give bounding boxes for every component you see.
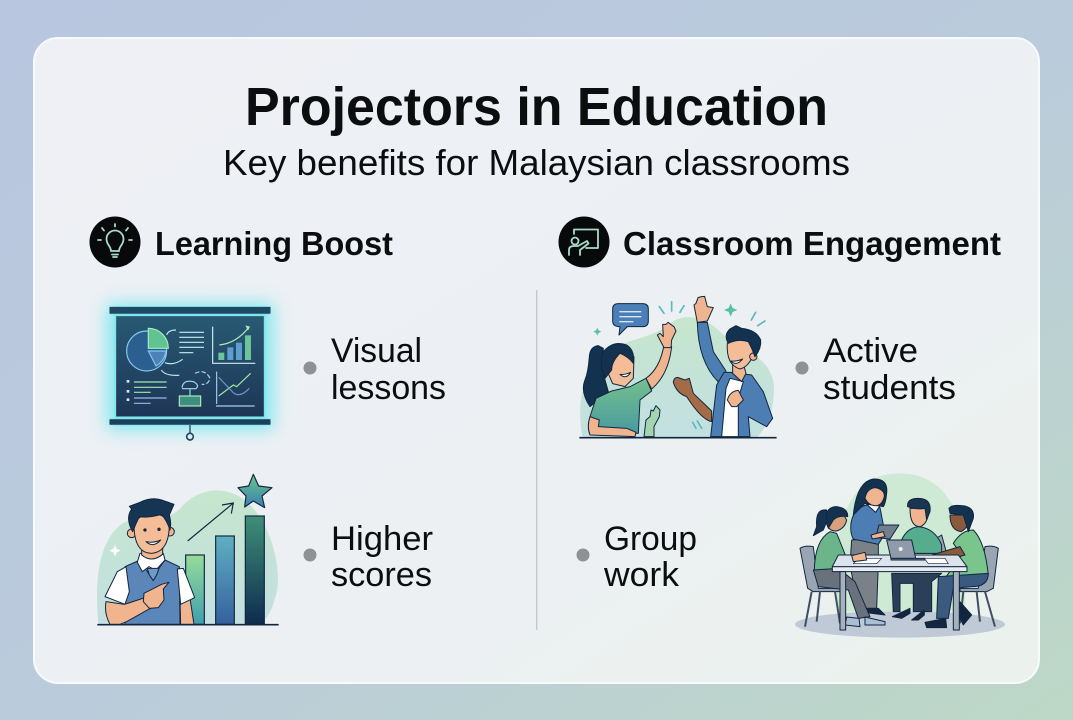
icon: light bulb <box>90 216 140 268</box>
label: Visual lessons: lessons <box>331 369 446 407</box>
illustration: projector screen with charts <box>107 303 273 440</box>
label: Higher scores: Higher <box>331 520 433 558</box>
label: Visual lessons: Visual <box>331 332 422 370</box>
illustration: students high-fiving <box>579 296 777 438</box>
label: Group work: Group <box>604 520 697 558</box>
label: Active students: Active <box>823 332 918 370</box>
bullet <box>304 548 316 562</box>
title: Projectors in Education <box>245 77 828 137</box>
heading: Classroom Engagement: Classroom Engagement <box>623 225 1001 262</box>
icon: teacher at board <box>558 216 610 268</box>
label: Higher scores: scores <box>331 556 432 594</box>
label: Active students: students <box>823 369 956 407</box>
bullet <box>304 362 316 374</box>
subtitle: Key benefits for Malaysian classrooms <box>223 142 850 183</box>
bullet <box>576 548 590 562</box>
label: Group work: work <box>603 556 680 594</box>
bullet <box>796 362 808 374</box>
illustration: student with rising bars <box>97 474 279 625</box>
divider <box>536 290 537 630</box>
illustration: group work at table <box>795 473 1005 638</box>
heading: Learning Boost: Learning Boost <box>155 225 393 262</box>
